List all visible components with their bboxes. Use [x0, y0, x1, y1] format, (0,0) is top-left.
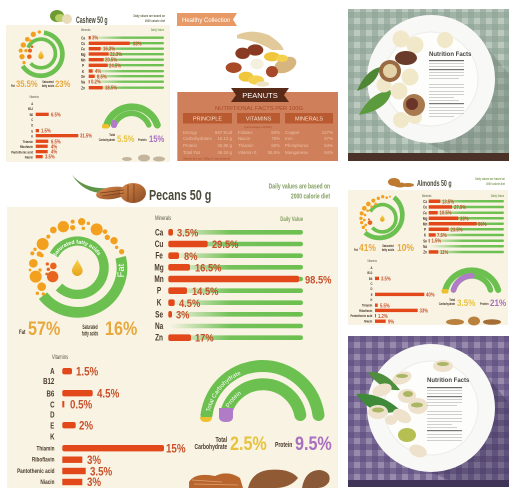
pecans mineral bars: Se [155, 309, 164, 320]
almonds mineral bars: 7.5% [437, 233, 447, 238]
icon: pecan with leaf [72, 175, 146, 203]
almonds daily values note [475, 177, 505, 186]
pecans vitamin bars: 2% [79, 420, 94, 433]
cashew fat labels: 23% [55, 78, 71, 89]
icon: almonds header [388, 178, 414, 188]
almonds fat labels: Saturated [382, 244, 394, 248]
cashew vitamin bars: E [31, 129, 34, 134]
almonds mineral bars: K [424, 233, 426, 238]
protein cap [219, 408, 233, 422]
cashew mineral bars: 18.5% [105, 85, 117, 91]
panel: almonds [348, 177, 508, 326]
pecans fat labels: fatty acids [82, 331, 98, 338]
pecans vitamin bars: 1.5% [76, 366, 99, 379]
cashew fat labels: Saturated [42, 80, 54, 84]
pecans ring chart [28, 218, 128, 318]
almonds vitamin bars: B12 [367, 271, 372, 275]
peanuts facts table: Phosphorus [285, 143, 309, 148]
fat bubbles [29, 218, 124, 296]
pecans arch chart: Total [215, 436, 227, 444]
cashew vitamin bars: C [31, 118, 34, 122]
cashew mineral bars: 22.3% [110, 52, 122, 57]
cashew vitamin bars: Pantothenic acid [11, 150, 33, 155]
pecans vitamin bars: Niacin [40, 479, 55, 486]
pecans vitamin bars: Thiamin [37, 446, 55, 453]
almonds vitamin bars: Vitamins [367, 259, 377, 263]
pecans mineral bars: Zn [155, 333, 163, 343]
ribbon: healthy collection [177, 13, 237, 26]
pecans vitamin bars: 15% [166, 443, 186, 456]
almonds mineral bars: Cu [423, 205, 428, 210]
nutrition facts label: Nutrition Facts [429, 52, 472, 58]
saturated bubbles [45, 262, 58, 282]
peanuts facts table: 55.5% [268, 150, 280, 155]
icon: pistachios and leaves [356, 360, 453, 460]
peanuts facts table: Total Fat [183, 150, 201, 155]
pecans mineral bars: Cu [155, 239, 164, 249]
pecans mineral bars: Mg [154, 262, 164, 273]
peanuts facts table: Niacin [238, 136, 251, 141]
icon: pecan nuts row [189, 470, 330, 488]
cashew mineral bars: Ca [81, 36, 86, 41]
cashew mineral bars: Minerals [81, 28, 91, 32]
almonds vitamin bars: A [371, 266, 373, 270]
icon: cashew header [50, 10, 72, 24]
peanuts facts table: Carbohydrates [183, 136, 213, 141]
icon: peanuts illustration [226, 32, 299, 87]
peanuts facts table: 60% [271, 130, 280, 135]
pecans vitamin bars: C [50, 399, 55, 410]
cashew vitamin bars: Riboflavin [20, 145, 33, 149]
icon: cashew nuts row [122, 154, 165, 162]
almonds fat labels: 10% [397, 242, 414, 253]
cashew mineral bars: 33% [133, 41, 141, 46]
pecans fat labels [19, 318, 138, 339]
cashew mineral bars: Fe [81, 47, 85, 52]
pecans mineral bars: 3% [176, 310, 189, 322]
peanuts facts table: 16.13 g [217, 136, 233, 141]
almonds vitamin bars: 9% [388, 319, 394, 325]
almonds mineral bars: Ca [423, 200, 428, 204]
pecans vitamin bars [17, 354, 186, 489]
almonds mineral bars: Se [423, 239, 427, 243]
pecans mineral bars: Daily Value [280, 216, 303, 223]
peanuts facts table: Manganese [285, 150, 309, 155]
cashew mineral bars: P [82, 64, 84, 68]
pecans mineral bars: Na [155, 321, 164, 331]
cashew vitamin bars: B6 [30, 113, 33, 117]
cashew arch chart: Total [109, 133, 115, 137]
panel: peanuts [177, 13, 338, 161]
cashew vitamin bars: K [31, 134, 34, 139]
cashew mineral bars: Mn [81, 58, 86, 63]
almonds mineral bars: Mg [423, 217, 428, 221]
pecans fat labels: 57% [28, 318, 61, 339]
icon: almonds row [446, 316, 501, 326]
cashew vitamin bars: Thiamin [23, 140, 33, 144]
almonds arch chart: 3.5% [457, 297, 476, 308]
almonds vitamin bars: E [371, 293, 373, 297]
peanuts facts table: PRINCIPLE [193, 116, 222, 122]
almonds vitamin bars: Niacin [364, 319, 372, 324]
cashew vitamin bars: 6.5% [51, 112, 61, 117]
cashew mineral bars: Cu [81, 42, 86, 46]
ribbon: peanuts: PEANUTS [242, 91, 278, 100]
peanuts facts table: 567 Kcal [215, 130, 232, 135]
pecans fat labels: Saturated [82, 324, 98, 331]
almonds vitamin bars: 1.2% [378, 314, 388, 319]
pecans mineral bars: Fe [155, 251, 163, 261]
pecans vitamin bars: Riboflavin [32, 457, 55, 464]
almonds vitamin bars: 40% [426, 292, 434, 298]
pecans mineral bars: 16.5% [195, 263, 221, 275]
pecans vitamin bars: 0.5% [70, 399, 93, 412]
pecans vitamin bars: 4.5% [97, 388, 120, 401]
pecans vitamin bars: D [50, 409, 55, 420]
almonds mineral bars: Na [423, 245, 428, 249]
nutrition facts label [429, 52, 472, 117]
cashew mineral bars: Daily Value [151, 28, 164, 32]
peanuts facts table: Values are per 100g of raw peanuts [183, 156, 231, 160]
cashew daily values note [133, 14, 165, 23]
almonds arch chart: Carbohydrate [439, 302, 455, 306]
cashew mineral bars: 3% [92, 35, 98, 41]
almonds mineral bars [422, 194, 504, 255]
pecans mineral bars: Minerals [155, 215, 172, 222]
icon: oil drop [72, 259, 83, 276]
almonds mineral bars: Mn [423, 222, 428, 226]
nutrition facts label [427, 378, 470, 441]
pecans mineral bars: P [157, 286, 161, 296]
almonds fat labels: 41% [359, 242, 376, 253]
cashew mineral bars: Na [81, 80, 86, 85]
plate shadow [386, 34, 509, 153]
almonds vitamin bars: 5.5% [380, 303, 390, 308]
pecans mineral bars: 14.5% [192, 286, 218, 298]
almonds mineral bars: 33% [460, 216, 468, 221]
cashew vitamin bars: B12 [28, 107, 33, 111]
nutrition facts label: Nutrition Facts [427, 378, 470, 384]
panel: macadamia plate [348, 9, 509, 161]
almonds mineral bars: P [424, 228, 427, 232]
panel: cashew [6, 10, 170, 162]
pecans mineral bars: 29.5% [212, 239, 238, 251]
cashew mineral bars: K [82, 70, 84, 74]
plate [367, 15, 495, 143]
pecans vitamin bars: K [50, 432, 55, 442]
almonds arch chart: Total [449, 298, 455, 302]
peanuts facts table: Energy [183, 130, 198, 135]
cashew vitamin bars: 4% [51, 149, 57, 155]
pecans mineral bars: 8% [184, 251, 197, 263]
cashew vitamin bars [11, 95, 92, 160]
peanuts facts table: 50% [271, 143, 280, 148]
peanuts facts table: 49.24 g [217, 150, 233, 155]
cashew mineral bars: Se [81, 75, 85, 79]
pecans mineral bars: Mn [154, 274, 164, 284]
pecans vitamin bars: B12 [43, 376, 54, 386]
cashew fat labels [11, 78, 71, 89]
peanuts facts table: 57% [324, 136, 333, 141]
cashew arch chart: Protein [138, 138, 147, 142]
almonds ring chart [359, 195, 402, 238]
pecans arch chart: 2.5% [230, 433, 267, 454]
cashew vitamin bars: 4% [51, 144, 57, 149]
table heading: NUTRITIONAL FACTS PER 100G [215, 106, 304, 112]
cashew fat labels: 35.5% [16, 78, 38, 89]
peanuts facts table: Copper [285, 130, 300, 135]
peanuts facts table: 75% [271, 136, 280, 141]
almonds vitamin bars: B6 [369, 277, 372, 281]
peanuts facts table: Thiamin [238, 143, 254, 148]
pecans arch chart: 9.5% [295, 433, 332, 454]
pecans mineral bars: Ca [155, 227, 164, 238]
peanuts facts table: 25.80 g [217, 143, 233, 148]
pecans vitamin bars: 3% [87, 454, 102, 467]
cashew vitamin bars: D [31, 123, 34, 128]
pecans vitamin bars: E [50, 420, 54, 431]
cashew mineral bars: 0.2% [91, 79, 101, 85]
pecans arch chart: Protein [226, 392, 242, 408]
icon: macadamia nuts and leaves [357, 30, 453, 128]
peanuts facts table: Iron [285, 136, 293, 141]
cashew daily values note: Daily values are based on [133, 14, 165, 18]
cashew arch chart: 15% [149, 133, 165, 144]
pecans vitamin bars: Vitamins [52, 354, 69, 361]
almonds arch chart: 21% [490, 297, 506, 308]
cashew vitamin bars: 3.5% [45, 154, 55, 160]
peanuts facts table: VITAMINS [246, 116, 272, 122]
pecans mineral bars: 17% [195, 333, 214, 345]
almonds vitamin bars: Pantothenic acid [350, 314, 372, 318]
pecans mineral bars [154, 215, 331, 345]
saturated fatty acids ring: Saturated fatty acids [52, 240, 100, 257]
almonds daily values note: 2000 calorie diet [486, 182, 505, 186]
pecans title: Pecans 50 g [149, 186, 211, 203]
pecans fat labels: 16% [105, 318, 138, 339]
pecans vitamin bars: B6 [46, 388, 54, 399]
cashew mineral bars: 4% [95, 69, 101, 74]
plate shadow [386, 363, 509, 480]
plate [367, 344, 495, 472]
cashew ring chart [19, 30, 62, 76]
almonds vitamin bars: Riboflavin [359, 309, 372, 313]
almonds mineral bars: Daily Value [491, 194, 504, 198]
almonds mineral bars: Zn [423, 250, 428, 255]
almonds mineral bars: 10.5% [439, 210, 452, 216]
cashew arch chart: 5.5% [117, 133, 135, 144]
cashew vitamin bars: 6.5% [51, 139, 61, 144]
pecans mineral bars: 3.5% [177, 228, 198, 240]
cashew arch chart [99, 107, 165, 144]
peanuts facts table [177, 88, 338, 161]
cashew vitamin bars: 1.5% [41, 128, 51, 134]
cashew vitamin bars: Vitamins [29, 95, 39, 99]
pecans arch chart: Total Carbohydrate [206, 372, 240, 411]
almonds fat labels [354, 242, 414, 253]
peanuts facts table: 54% [324, 143, 333, 148]
almonds mineral bars: Fe [423, 211, 427, 215]
peanuts facts table: 127% [322, 130, 333, 135]
almonds mineral bars: Minerals [422, 194, 432, 198]
almonds vitamin bars: Thiamin [362, 303, 372, 308]
peanuts facts table: Protein [183, 143, 197, 148]
cashew mineral bars: Mg [81, 53, 86, 57]
pecans vitamin bars: 3.5% [90, 466, 113, 479]
peanuts facts table: (percentage of RDA) [244, 125, 272, 129]
pecans mineral bars: 98.5% [305, 275, 331, 287]
almonds vitamin bars: K [371, 298, 373, 302]
peanuts facts table: MINERALS [295, 116, 323, 122]
cashew mineral bars: 24.5% [109, 63, 121, 68]
almonds mineral bars: 56% [478, 221, 486, 227]
pecans arch chart [194, 360, 332, 454]
pecans arch chart: Protein [275, 441, 293, 449]
peanuts facts table: 84% [324, 150, 333, 155]
peanuts facts table: Folates [238, 130, 253, 135]
pecans daily values note [269, 183, 330, 201]
fat ring: Fat [116, 263, 126, 277]
pecans daily values note: 2000 calorie diet [291, 193, 330, 201]
almonds title: Almonds 50 g [417, 180, 452, 188]
cashew fat labels: fatty acids [42, 84, 55, 88]
cashew fat labels: Fat [11, 84, 15, 88]
pecans mineral bars: 4.5% [179, 298, 200, 310]
cashew vitamin bars: 31.5% [80, 133, 92, 139]
almonds mineral bars: 13.5% [442, 199, 454, 204]
almonds arch chart: Protein [480, 302, 489, 306]
cashew mineral bars: 16.3% [103, 46, 115, 52]
almonds vitamin bars: D [371, 287, 373, 291]
pecans vitamin bars: Pantothenic acid [17, 468, 55, 475]
pecans daily values note: Daily values are based on [269, 183, 330, 191]
almonds daily values note: Daily values are based on [475, 177, 505, 181]
pecans vitamin bars: A [50, 366, 55, 376]
cashew arch chart: Carbohydrate [99, 138, 115, 142]
ribbon: healthy collection: Healthy Collection [182, 18, 230, 24]
pecans mineral bars: K [157, 298, 162, 308]
cashew daily values note: 2000 calorie diet [145, 19, 165, 23]
ribbon: peanuts [231, 88, 289, 102]
almonds vitamin bars: 33% [419, 308, 428, 314]
panel: pistachio plate [348, 336, 509, 487]
almonds fat labels: fatty acids [382, 248, 395, 252]
cashew vitamin bars: A [31, 102, 34, 106]
almonds arch chart [439, 270, 506, 308]
almonds mineral bars: 27.5% [454, 205, 466, 210]
cashew mineral bars: Zn [81, 86, 86, 91]
cashew mineral bars: 8.5% [97, 74, 107, 79]
peanuts facts table: Vitamin E [238, 150, 257, 155]
almonds vitamin bars: C [371, 282, 373, 286]
pecans vitamin bars: 3% [87, 476, 102, 489]
almonds fat labels: Fat [354, 248, 358, 252]
total carbohydrate cap [200, 417, 212, 422]
cashew mineral bars: 20.5% [105, 57, 117, 63]
almonds mineral bars: 1.5% [432, 238, 441, 244]
almonds vitamin bars: 3.5% [381, 276, 391, 282]
pecans arch chart: Carbohydrate [195, 443, 228, 451]
almonds mineral bars: 11% [440, 250, 448, 255]
almonds vitamin bars [350, 259, 434, 325]
almonds mineral bars: 23.5% [450, 227, 463, 232]
cashew title: Cashew 50 g [76, 14, 108, 25]
cashew vitamin bars: Niacin [25, 155, 33, 160]
panel: pecans [7, 175, 338, 489]
cashew mineral bars [81, 28, 164, 91]
pecans fat labels: Fat [19, 329, 26, 336]
